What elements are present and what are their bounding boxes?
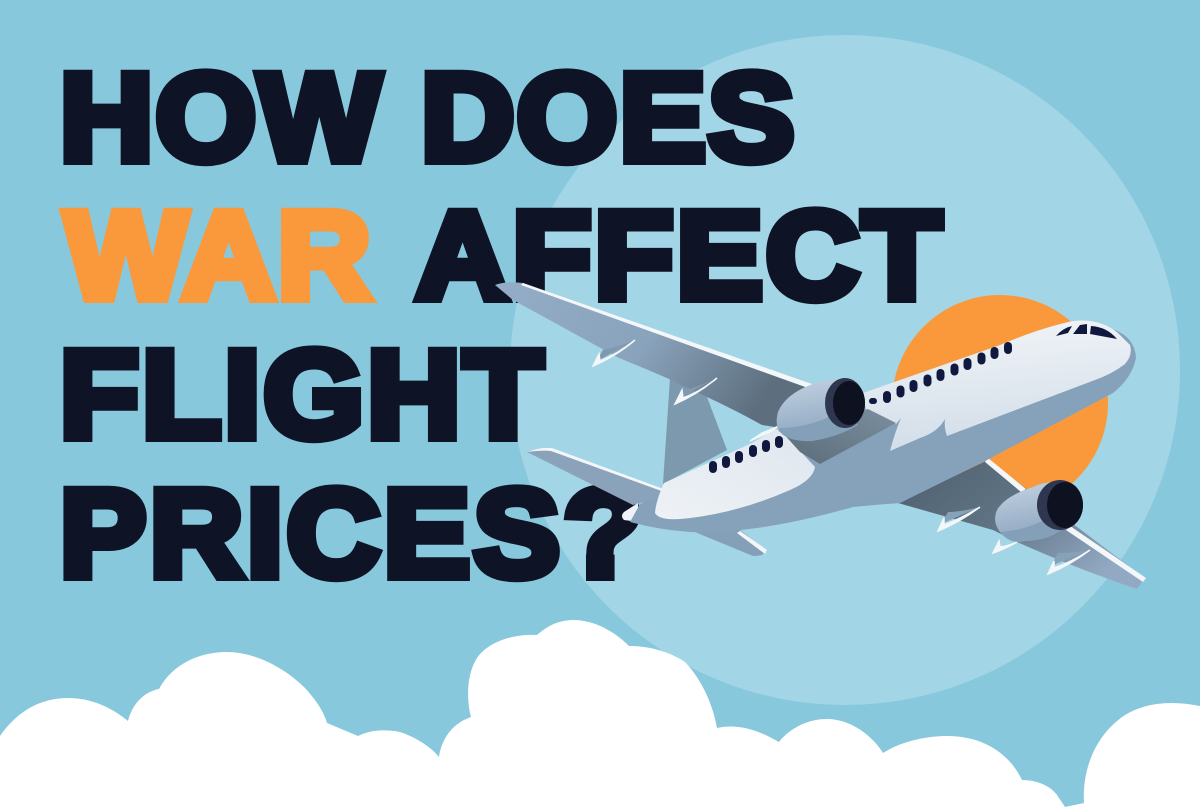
title [60, 47, 941, 602]
cockpit windows [1056, 324, 1117, 339]
near wing [495, 282, 812, 427]
near wing root [782, 409, 896, 464]
title: PRICES? [60, 463, 642, 602]
fuselage white front [863, 320, 1131, 451]
tail fin [663, 378, 727, 484]
title: AFFECT [416, 185, 941, 324]
fuselage lower [630, 321, 1136, 532]
far wing flap fairings [938, 507, 1090, 574]
clouds [0, 620, 1200, 811]
passenger windows [709, 342, 1012, 473]
tail cone [622, 503, 639, 522]
far wing [898, 458, 1146, 589]
title: FLIGHT [60, 324, 543, 463]
upper stabilizer [527, 448, 669, 505]
title: WAR [65, 185, 371, 324]
title: HOW DOES [60, 47, 794, 186]
near engine [777, 378, 865, 441]
lower stabilizer [690, 530, 767, 556]
far engine [995, 480, 1083, 542]
fuselage white rear [655, 429, 815, 519]
near wing flap fairings [593, 340, 777, 441]
background circle [510, 35, 1180, 705]
airplane illustration [495, 282, 1146, 589]
orange sun [892, 295, 1108, 511]
